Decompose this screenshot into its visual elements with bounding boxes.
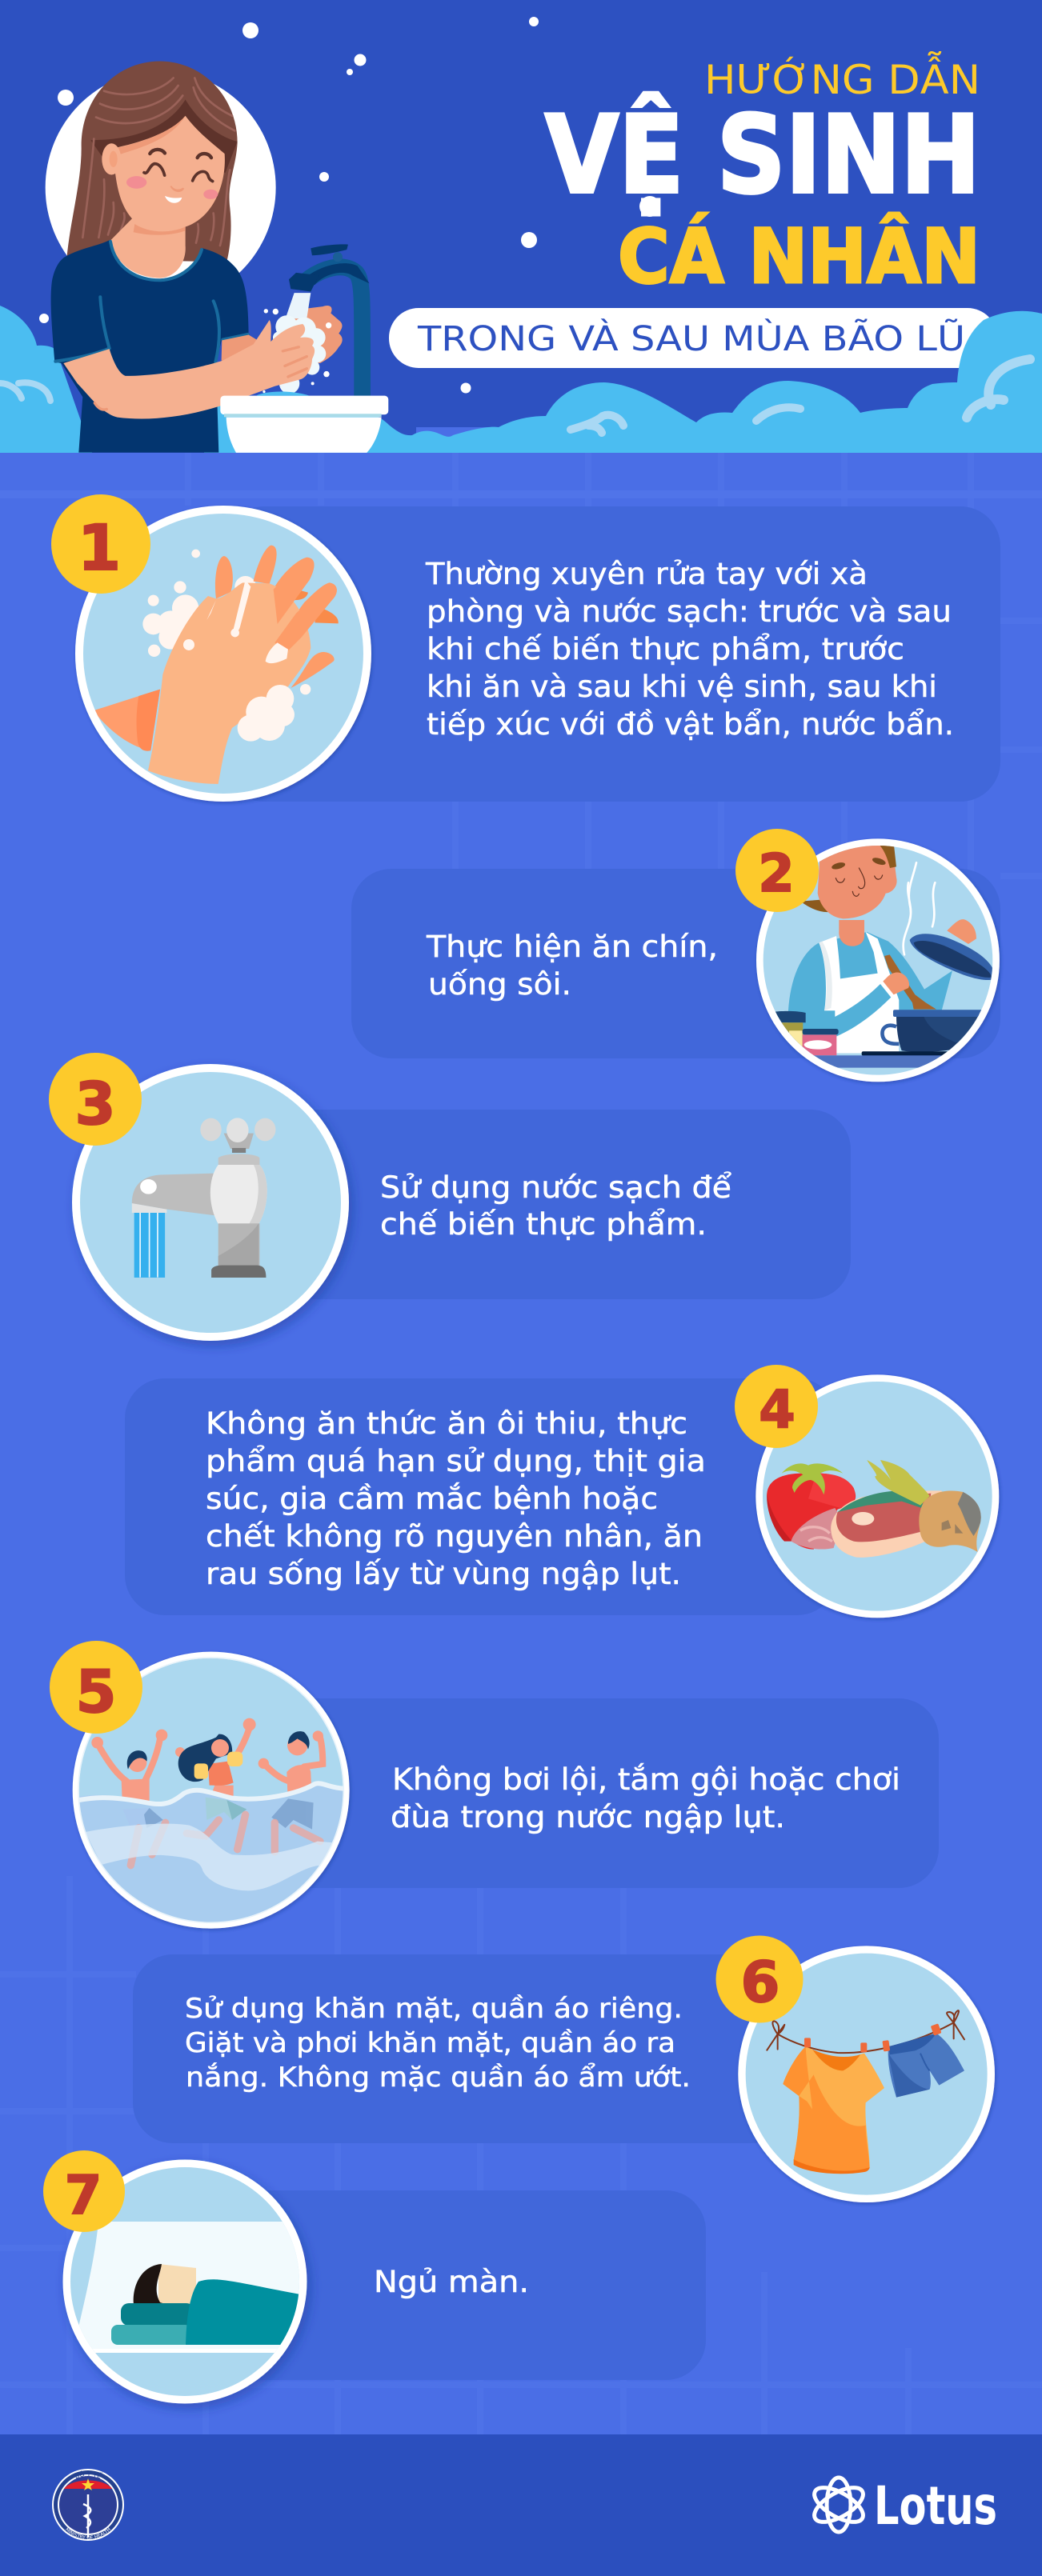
step 2 text: Thực hiện ăn chín, xyxy=(426,930,718,964)
step 4 number badge xyxy=(735,1365,818,1448)
step 4 text: súc, gia cầm mắc bệnh hoặc xyxy=(206,1482,658,1516)
logo: Ministry of Health crest xyxy=(52,2469,124,2541)
step 6 circle illustration: clothesline xyxy=(738,1946,995,2202)
step 1 panel xyxy=(51,494,1000,802)
step 1 text xyxy=(425,557,954,742)
logo: Ministry of Health crest: BỘ Y TẾ xyxy=(75,2470,102,2478)
step 2 circle illustration: cook xyxy=(756,838,1000,1082)
step 5 card xyxy=(240,1698,939,1888)
flood water clouds xyxy=(0,306,1042,453)
step 1 text: Thường xuyên rửa tay với xà xyxy=(425,557,868,591)
step 3 number badge xyxy=(49,1053,142,1146)
step 4 circle illustration: spoiled food xyxy=(755,1374,999,1618)
step 2 panel xyxy=(351,829,1000,1082)
step 7 card xyxy=(224,2190,706,2380)
title: second main line: CÁ NHÂN xyxy=(618,212,980,301)
step 5 number badge xyxy=(50,1641,142,1734)
eyes and brows xyxy=(144,150,213,182)
step 5 circle illustration: children in flood water xyxy=(66,1652,350,1934)
step 3 card xyxy=(240,1110,851,1299)
title: subtitle line one: HƯỚNG DẪN xyxy=(704,51,980,103)
step 1 text: tiếp xúc với đồ vật bẩn, nước bẩn. xyxy=(427,707,954,742)
step 4 text xyxy=(206,1406,706,1591)
step 2 number badge: 2 xyxy=(758,844,795,904)
step 4 text: phẩm quá hạn sử dụng, thịt gia xyxy=(206,1444,706,1478)
step 5 text: đùa trong nước ngập lụt. xyxy=(391,1800,785,1834)
step 6 panel xyxy=(133,1936,995,2202)
near arm and hand xyxy=(63,320,315,419)
step 2 text: uống sôi. xyxy=(428,967,571,1002)
logo: Lotus xyxy=(809,2475,997,2537)
far arm xyxy=(222,335,267,367)
step 6 number badge xyxy=(715,1936,804,2022)
step 3 number badge: 3 xyxy=(75,1070,115,1138)
neck xyxy=(110,216,186,278)
step 3 text xyxy=(380,1170,731,1242)
step 4 card xyxy=(125,1378,837,1615)
step 1 number badge xyxy=(51,494,150,594)
step 7 number badge xyxy=(43,2150,125,2232)
step 4 panel xyxy=(125,1365,999,1618)
step 4 number badge: 4 xyxy=(759,1380,796,1440)
step 7 circle illustration: sleeping under a net xyxy=(62,2160,320,2403)
step 4 text: chết không rõ nguyên nhân, ăn xyxy=(206,1519,703,1554)
step 5 text xyxy=(391,1762,900,1834)
step 5 text: Không bơi lội, tắm gội hoặc chơi xyxy=(392,1762,900,1797)
title pill xyxy=(389,308,997,368)
step 6 text: nắng. Không mặc quần áo ẩm ướt. xyxy=(186,2062,691,2094)
step 4 text: rau sống lấy từ vùng ngập lụt. xyxy=(206,1557,681,1591)
decorative white dots xyxy=(39,17,660,394)
children xyxy=(100,1728,323,1782)
illustration: woman washing hands at sink xyxy=(46,62,388,453)
title: main line: VỆ SINH xyxy=(545,92,980,218)
faucet xyxy=(302,267,363,396)
step 3 text: Sử dụng nước sạch để xyxy=(380,1170,731,1205)
face xyxy=(114,116,225,230)
step 1 number badge: 1 xyxy=(78,513,121,585)
soap foam xyxy=(273,315,326,394)
step 7 text: Ngủ màn. xyxy=(374,2265,529,2299)
step 6 text xyxy=(185,1993,691,2094)
title pill: TRONG VÀ SAU MÙA BÃO LŨ xyxy=(417,318,965,359)
water body xyxy=(79,1786,343,1922)
step 2 number badge xyxy=(735,829,819,912)
step 2 card xyxy=(351,869,1000,1058)
step 1 text: phòng và nước sạch: trước và sau xyxy=(427,594,952,629)
step 6 number badge: 6 xyxy=(741,1950,779,2015)
step 5 number badge: 5 xyxy=(76,1658,116,1726)
step 1 text: khi ăn và sau khi vệ sinh, sau khi xyxy=(427,670,937,704)
shirt xyxy=(51,240,249,453)
white sun circle xyxy=(46,70,276,304)
hair xyxy=(66,62,238,262)
Lotus emblem xyxy=(809,2478,868,2532)
step 6 card xyxy=(133,1954,813,2143)
step 1 circle illustration: washing hands xyxy=(75,506,371,802)
step 5 panel xyxy=(50,1641,939,1934)
header xyxy=(0,0,1042,453)
basin xyxy=(226,418,382,453)
water stream xyxy=(286,293,311,318)
step 2 text xyxy=(426,930,718,1002)
submerged legs and shorts xyxy=(144,1797,314,1829)
step 3 panel xyxy=(49,1053,851,1341)
step 6 text: Sử dụng khăn mặt, quần áo riêng. xyxy=(185,1993,683,2025)
logo: Ministry of Health crest: MINISTRY OF HEALTH xyxy=(66,2527,110,2539)
step 1 text: khi chế biến thực phẩm, trước xyxy=(427,632,904,666)
step 7 panel xyxy=(43,2150,706,2403)
step 3 text: chế biến thực phẩm. xyxy=(380,1207,707,1242)
step 7 number badge: 7 xyxy=(65,2164,102,2226)
step 3 circle illustration: tap xyxy=(72,1064,349,1341)
footer xyxy=(0,2434,1042,2576)
step 1 card xyxy=(224,506,1000,802)
step 4 text: Không ăn thức ăn ôi thiu, thực xyxy=(206,1406,687,1441)
step 6 text: Giặt và phơi khăn mặt, quần áo ra xyxy=(185,2027,675,2059)
Lotus wordmark: Lotus xyxy=(874,2475,997,2537)
